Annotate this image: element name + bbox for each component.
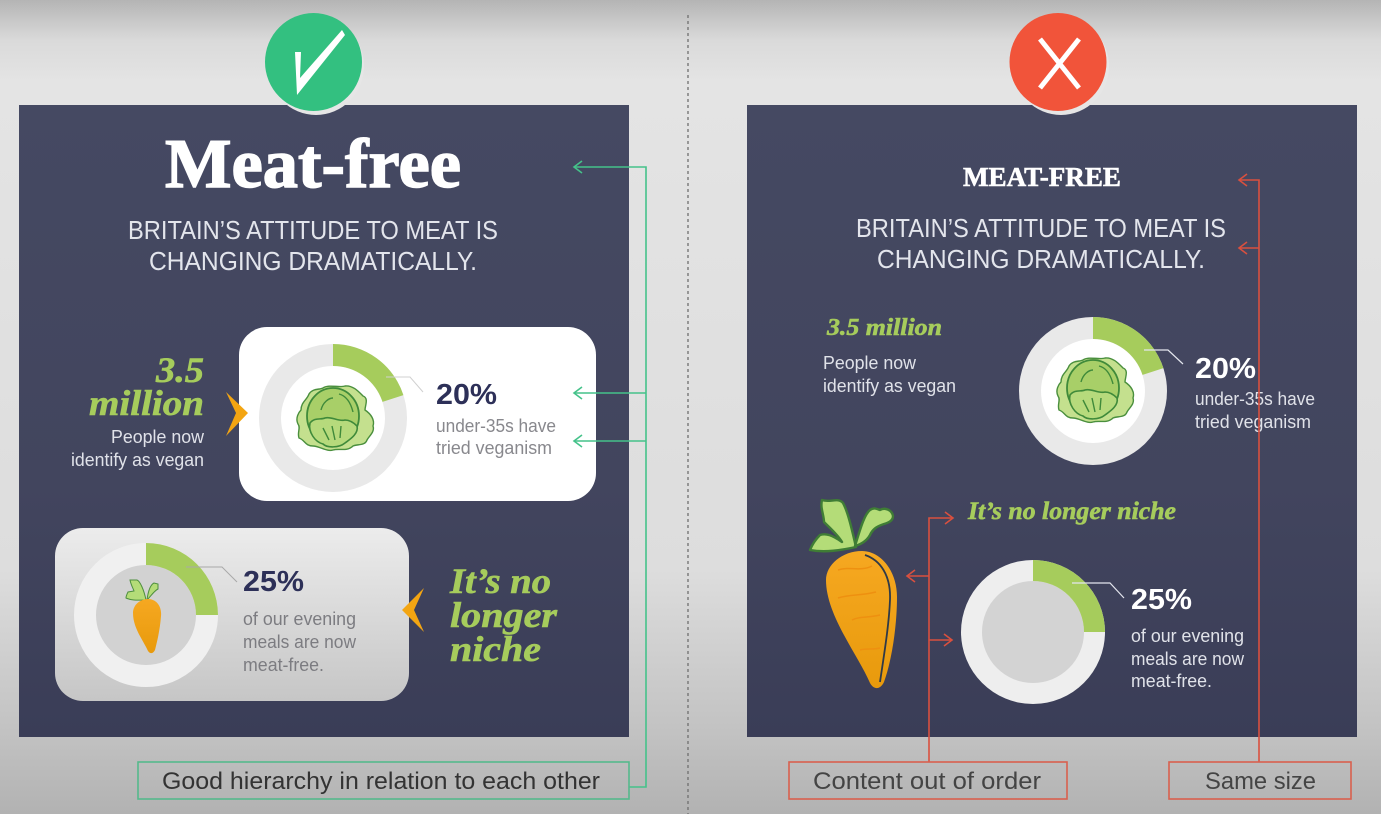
- stat: 25 percent: 25%: [1131, 584, 1192, 616]
- label: good hierarchy: Good hierarchy in relation to each other: [162, 768, 600, 795]
- stat: 25 percent: meat-free.: [1131, 671, 1212, 691]
- stat: 3.5 million: [823, 315, 956, 396]
- subtitle: [856, 213, 1226, 274]
- subtitle: CHANGING DRAMATICALLY.: [149, 246, 477, 276]
- stat: 20 percent: 20%: [1195, 353, 1256, 385]
- stat: 25 percent: meat-free.: [243, 655, 324, 675]
- card: 20 percent: [239, 327, 596, 501]
- icon: small carrot: [126, 580, 161, 653]
- stat: 3.5 million: [71, 350, 205, 470]
- leader line: [1072, 583, 1124, 598]
- annotation: content out of order arrows: [907, 512, 953, 762]
- title: Meat-free: Meat-free: [165, 126, 461, 203]
- callout: It's no longer niche: longer: [450, 595, 558, 635]
- donut chart: 25 percent: [85, 543, 218, 676]
- stat: 20 percent: [436, 379, 556, 458]
- stat: 3.5 million: 3.5 million: [826, 315, 942, 341]
- icon: orange chevron right: [226, 392, 248, 436]
- icon: large carrot: [810, 500, 897, 688]
- stat: 3.5 million: People now: [111, 427, 205, 447]
- stat: 3.5 million: People now: [823, 353, 917, 373]
- icon: orange chevron left: [402, 588, 424, 632]
- leader line: [1144, 350, 1183, 364]
- annotation: good hierarchy arrows: [574, 161, 646, 787]
- icon: red cross badge: [1010, 13, 1109, 115]
- stat: 3.5 million: identify as vegan: [71, 450, 204, 470]
- card: 25 percent: [55, 528, 409, 701]
- callout: It's no longer niche: It’s no: [449, 561, 551, 601]
- stat: 3.5 million: 3.5: [155, 350, 204, 390]
- stat: 20 percent: tried veganism: [436, 438, 552, 458]
- donut chart: 20 percent: [270, 344, 403, 481]
- label: content out of order: Content out of order: [813, 768, 1041, 795]
- stat: 20 percent: 20%: [436, 379, 497, 411]
- callout: It's no longer niche: It’s no longer niche: [967, 498, 1176, 525]
- label: same size: [1169, 762, 1351, 799]
- subtitle: CHANGING DRAMATICALLY.: [877, 244, 1205, 274]
- label: content out of order: [789, 762, 1067, 799]
- stat: 25 percent: meals are now: [1131, 649, 1245, 669]
- donut chart: 25 percent: [961, 560, 1105, 704]
- stat: 25 percent: of our evening: [1131, 626, 1244, 646]
- stat: 25 percent: 25%: [243, 566, 304, 598]
- icon: lettuce: [1057, 358, 1134, 422]
- stat: 20 percent: under-35s have: [436, 416, 556, 436]
- leader line: [386, 377, 423, 392]
- stat: 25 percent: of our evening: [243, 609, 356, 629]
- stat: 25 percent: [243, 566, 357, 675]
- stat: 20 percent: under-35s have: [1195, 389, 1315, 409]
- stat: 3.5 million: identify as vegan: [823, 376, 956, 396]
- stat: 20 percent: tried veganism: [1195, 412, 1311, 432]
- leader line: [186, 567, 237, 582]
- title: MEAT-FREE: MEAT-FREE: [963, 162, 1121, 192]
- annotation: same size arrows: [1239, 174, 1259, 762]
- label: good hierarchy: [138, 762, 629, 799]
- stat: 25 percent: [1131, 584, 1245, 691]
- panel: bad example: [747, 105, 1357, 737]
- subtitle: BRITAIN’S ATTITUDE TO MEAT IS: [856, 213, 1226, 243]
- panel: good example: [19, 105, 629, 737]
- label: same size: Same size: [1205, 768, 1316, 795]
- donut chart: 20 percent: [1019, 317, 1167, 465]
- stat: 25 percent: meals are now: [243, 632, 357, 652]
- stat: 20 percent: [1195, 353, 1315, 432]
- subtitle: [128, 215, 498, 276]
- subtitle: BRITAIN’S ATTITUDE TO MEAT IS: [128, 215, 498, 245]
- callout: It's no longer niche: [449, 561, 558, 669]
- callout: It's no longer niche: niche: [450, 629, 541, 669]
- icon: green check badge: [265, 13, 364, 115]
- stat: 3.5 million: million: [89, 383, 204, 423]
- icon: lettuce: [297, 386, 374, 450]
